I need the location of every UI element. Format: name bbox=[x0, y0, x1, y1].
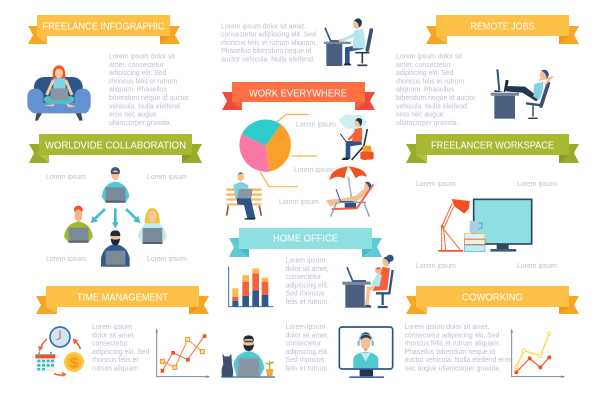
labels: pie lorem ipsum: Lorem ipsum bbox=[294, 167, 334, 174]
banner: freelancer workspace bbox=[406, 134, 579, 163]
icon: person on beach lounger under umbrella bbox=[326, 166, 373, 217]
text block: remote jobs description: amet, consectetur bbox=[396, 62, 451, 69]
chart: coworking line chart bbox=[510, 329, 565, 378]
text block: time management description: Lorem ipsum bbox=[92, 324, 132, 331]
text block: home office second: Sed rhoncus bbox=[286, 357, 325, 364]
text block: freelance description: bibendum neque id auctor bbox=[109, 95, 189, 102]
labels: collaboration lorem ipsum: Lorem ipsum bbox=[147, 174, 187, 181]
text block: time management description: consectetur bbox=[92, 341, 128, 348]
panel: freelance infographic bbox=[27, 15, 189, 127]
banner: coworking bbox=[406, 286, 579, 314]
labels: workspace lorem ipsum: Lorem ipsum bbox=[416, 181, 456, 188]
text block: home office first: adipiscing elit. bbox=[286, 282, 329, 289]
icon: desk with monitor, lamp, books and cup bbox=[438, 199, 532, 252]
text block: remote jobs description: bibendum neque id auctor bbox=[396, 95, 476, 102]
text block: remote jobs description: rhoncus felis et rutrum bbox=[396, 78, 464, 85]
text block: home office first: felis et rutrum. bbox=[286, 299, 329, 306]
banner: work everywhere bbox=[222, 82, 375, 110]
icon: man with feet on desk bbox=[491, 69, 552, 119]
banner: worldwide collaboration bbox=[29, 134, 202, 163]
labels: collaboration lorem ipsum: Lorem ipsum bbox=[46, 256, 86, 263]
chart: stacked bar chart bbox=[229, 267, 273, 307]
icon: man working at desk bbox=[324, 18, 371, 66]
banner: coworking: COWORKING bbox=[462, 292, 523, 304]
panel: remote jobs bbox=[396, 15, 579, 127]
panel: coworking bbox=[404, 286, 579, 378]
banner: time management: TIME MANAGEMENT bbox=[77, 292, 169, 304]
text block: centre intro: rhoncus felis et rutrum aliquam. bbox=[221, 40, 317, 47]
icon: video call monitor bbox=[339, 327, 393, 378]
chart: time management line chart bbox=[155, 328, 210, 378]
panel: time management bbox=[35, 286, 210, 378]
text block: coworking description: Lorem ipsum dolor sit amet, bbox=[404, 324, 490, 331]
panel: top centre desk worker bbox=[221, 18, 371, 66]
text block: freelance description: ullamcorper gravida. bbox=[109, 120, 172, 127]
text block: coworking description: Phasellus bibendum neque id bbox=[404, 349, 495, 356]
labels: workspace lorem ipsum: Lorem ipsum bbox=[517, 263, 557, 270]
text block: freelance description: aliquam. Phasellus bbox=[109, 87, 167, 94]
text block: centre intro: consectetur adipiscing elit. Sed bbox=[221, 32, 316, 39]
labels: pie lorem ipsum: Lorem ipsum bbox=[279, 199, 319, 206]
text block: coworking description: rhoncus felis et rutrum aliquam. bbox=[404, 341, 501, 348]
text block: time management description: rhoncus felis et bbox=[92, 357, 138, 364]
banner: work everywhere: WORK EVERYWHERE bbox=[249, 88, 347, 100]
text block: freelance description: adipiscing elit. Sed bbox=[109, 70, 167, 77]
text block: time management description: adipiscing elit. Sed bbox=[92, 349, 150, 356]
banner: freelancer workspace: FREELANCER WORKSPACE bbox=[431, 140, 554, 152]
text block: home office second: consectetur bbox=[286, 341, 322, 348]
text block: remote jobs description: aliquam. Phasellus bbox=[396, 87, 454, 94]
text block: centre intro: Lorem ipsum dolor sit amet, bbox=[221, 24, 306, 30]
labels: pie lorem ipsum: Lorem ipsum bbox=[296, 122, 336, 128]
banner: freelance infographic: FREELANCE INFOGRAPHIC bbox=[42, 20, 165, 32]
panel: work everywhere bbox=[222, 82, 375, 220]
icon: clock, calendar and coin cycle bbox=[35, 327, 84, 377]
text block: time management description: rutrum aliquam. bbox=[92, 366, 140, 372]
labels: workspace lorem ipsum: Lorem ipsum bbox=[517, 181, 557, 188]
text block: freelance description: amet, consectetur bbox=[109, 62, 164, 69]
text block: remote jobs description: ullamcorper gravida. bbox=[396, 120, 459, 127]
banner: home office: HOME OFFICE bbox=[273, 232, 338, 244]
banner: home office bbox=[229, 228, 382, 257]
text block: remote jobs description: vehicula. Nulla eleifend bbox=[396, 103, 467, 110]
banner: worldwide collaboration: WORLDVIDE COLLABORATION bbox=[45, 140, 186, 152]
text block: remote jobs description: eros nec augue bbox=[396, 112, 444, 119]
text block: coworking description: nec augue ullamcorper gravida. bbox=[404, 366, 501, 372]
icon: man with laptop, cat and plant bbox=[221, 335, 275, 378]
icon: clock, calendar and coin cycle: $ bbox=[70, 354, 78, 370]
chart: pie chart bbox=[239, 114, 317, 187]
text block: centre intro: Phasellus bibendum neque id bbox=[221, 48, 312, 55]
icon: woman with laptop on sofa bbox=[27, 65, 91, 121]
text block: home office first: Lorem ipsum bbox=[286, 258, 326, 264]
banner: freelance infographic bbox=[28, 15, 180, 44]
text block: freelance description: eros nec augue bbox=[109, 112, 157, 119]
text block: home office second: Lorem ipsum bbox=[286, 324, 326, 331]
text block: centre intro: auctor vehicula. Nulla eleifend. bbox=[221, 56, 315, 63]
text block: remote jobs description: adipiscing elit. Sed bbox=[396, 70, 454, 77]
labels: collaboration lorem ipsum: Lorem ipsum bbox=[46, 174, 86, 181]
text block: home office first: consectetur bbox=[286, 274, 322, 281]
text block: home office second: felis et rutrum. bbox=[286, 366, 329, 372]
text block: home office second: dolor sit amet, bbox=[286, 332, 329, 339]
text block: freelance description: rhoncus felis et rutrum bbox=[109, 78, 177, 85]
text block: home office second: adipiscing elit. bbox=[286, 349, 329, 356]
text block: time management description: dolor sit amet, bbox=[92, 332, 135, 339]
labels: workspace lorem ipsum: Lorem ipsum bbox=[416, 263, 456, 270]
labels: pie lorem ipsum bbox=[279, 122, 336, 206]
labels: collaboration lorem ipsum bbox=[46, 174, 187, 263]
labels: workspace lorem ipsum bbox=[416, 181, 557, 270]
text block: home office first: dolor sit amet, bbox=[286, 266, 329, 273]
text block: remote jobs description: Lorem ipsum dolor sit bbox=[396, 54, 462, 60]
text block: coworking description: auctor vehicula. Nulla eleifend eros bbox=[404, 357, 512, 364]
text block: freelance description: Lorem ipsum dolor sit bbox=[109, 54, 175, 60]
icon: man with laptop and backpack bbox=[339, 114, 374, 160]
text block: freelance description: vehicula. Nulla eleifend bbox=[109, 103, 180, 110]
panel: worldwide collaboration bbox=[29, 134, 202, 267]
icon: man on bench with laptop bbox=[226, 172, 262, 220]
icon: woman with child at desk bbox=[342, 255, 394, 308]
labels: collaboration lorem ipsum: Lorem ipsum bbox=[147, 256, 187, 263]
diagram: team of four connected by arrows bbox=[64, 167, 167, 267]
panel: freelancer workspace bbox=[406, 134, 579, 270]
banner: remote jobs bbox=[426, 15, 579, 44]
text block: coworking description: consectetur adipiscing elit. Sed bbox=[404, 332, 500, 339]
panel: home office bbox=[221, 228, 394, 378]
text block: home office first: Sed rhoncus bbox=[286, 291, 325, 298]
banner: remote jobs: REMOTE JOBS bbox=[470, 20, 534, 32]
banner: time management bbox=[36, 286, 209, 314]
